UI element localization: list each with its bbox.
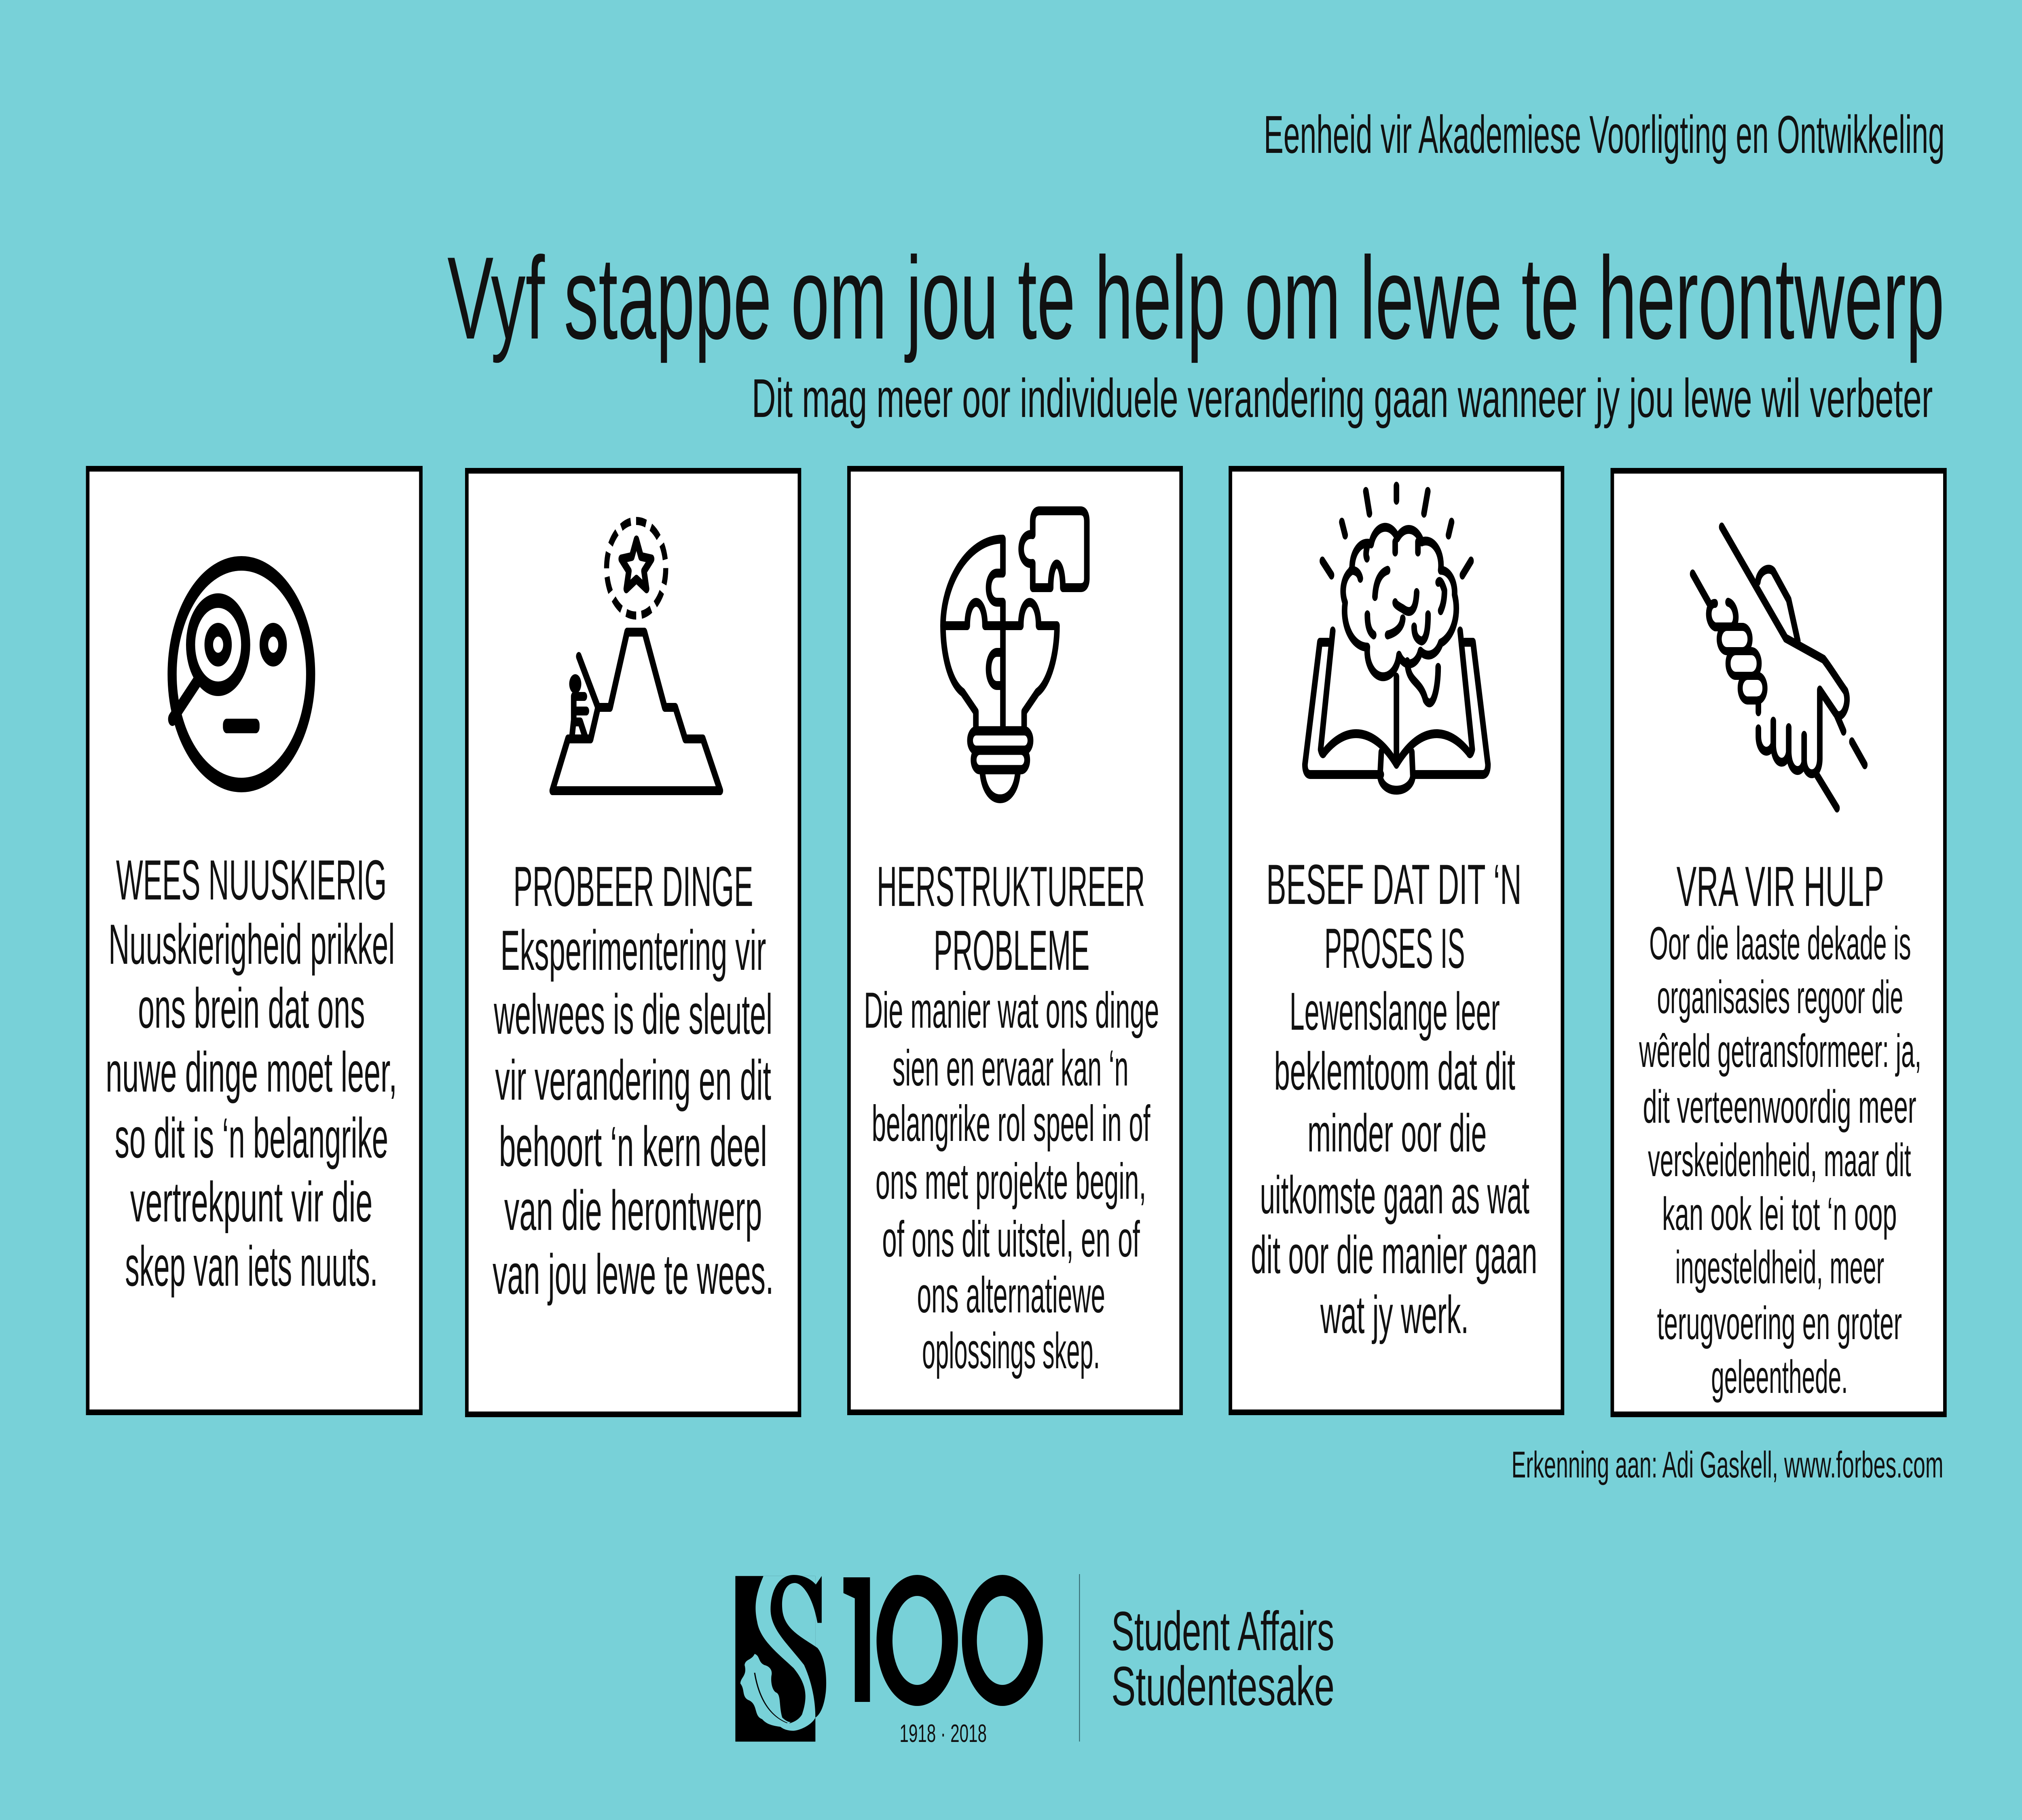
body text: belangrike rol speel in of (872, 1096, 1151, 1152)
department name: Student Affairs (1111, 1601, 1334, 1662)
heading: WEES NUUSKIERIG (116, 848, 387, 912)
body text (864, 982, 1159, 1380)
body text: wêreld getransformeer: ja, (1639, 1025, 1921, 1077)
heading (1266, 853, 1521, 980)
department name: Studentesake (1111, 1656, 1335, 1717)
body text: oplossings skep. (922, 1323, 1100, 1380)
panel: probeer dinge (467, 471, 799, 1414)
body text: so dit is ‘n belangrike (115, 1106, 388, 1170)
panel: wees nuuskierig (88, 469, 421, 1412)
body text: terugvoering en groter (1657, 1297, 1902, 1349)
body text: geleenthede. (1711, 1351, 1848, 1403)
body text: Nuuskierigheid prikkel (108, 912, 395, 976)
heading: BESEF DAT DIT ‘N (1266, 853, 1521, 916)
body text: of ons dit uitstel, en of (882, 1211, 1140, 1268)
icon: brain over open book (1305, 486, 1488, 790)
body text: wat jy werk. (1320, 1285, 1469, 1345)
body text (1251, 982, 1537, 1345)
panel: herstruktureer probleme (849, 469, 1181, 1412)
body text (106, 912, 397, 1298)
heading: HERSTRUKTUREER (877, 855, 1145, 918)
panel: vra vir hulp (1612, 471, 1945, 1414)
body text: beklemtoom dat dit (1274, 1041, 1515, 1101)
heading (877, 855, 1145, 982)
heading: PROBLEME (934, 918, 1089, 982)
department name (1111, 1601, 1335, 1717)
body text: ons brein dat ons (138, 976, 365, 1040)
body text: van die herontwerp (504, 1179, 762, 1242)
body text: skep van iets nuuts. (125, 1234, 378, 1298)
body text: van jou lewe te wees. (493, 1242, 774, 1306)
title: Vyf stappe om jou te help om lewe te herontwerp (447, 233, 1944, 364)
body text: welwees is die sleutel (494, 982, 772, 1046)
icon: puzzle light bulb (943, 511, 1087, 799)
panel: besef dat dit n proses is (1230, 469, 1563, 1412)
heading: PROBEER DINGE (513, 855, 753, 918)
body text: Eksperimentering vir (501, 918, 766, 982)
body text: behoort ‘n kern deel (499, 1115, 767, 1178)
credit line: Erkenning aan: Adi Gaskell, www.forbes.com (1512, 1444, 1944, 1486)
body text: Oor die laaste dekade is (1649, 918, 1911, 969)
unit name: Eenheid vir Akademiese Voorligting en Ontwikkeling (1264, 105, 1945, 165)
logo divider (1079, 1574, 1080, 1742)
logo: S100 (735, 1575, 1043, 1747)
card frame (88, 469, 421, 1412)
logo numeral 100 (844, 1575, 1043, 1706)
icon: face with magnifying glass (172, 563, 311, 785)
icon: mountain climber and star (552, 521, 720, 791)
body text: organisasies regoor die (1657, 971, 1903, 1023)
body text: Die manier wat ons dinge (864, 982, 1159, 1039)
body text: verskeidenheid, maar dit (1648, 1134, 1911, 1186)
body text (493, 918, 774, 1306)
card frame (1612, 471, 1945, 1414)
card frame (849, 469, 1181, 1412)
icon: helping hands (1693, 527, 1865, 808)
body text: vertrekpunt vir die (130, 1170, 372, 1234)
card frame (1230, 469, 1563, 1412)
body text: minder oor die (1307, 1103, 1487, 1163)
heading: PROSES IS (1324, 916, 1465, 980)
body text: sien en ervaar kan ‘n (893, 1040, 1129, 1097)
body text: uitkomste gaan as wat (1260, 1165, 1529, 1225)
logo crest (735, 1575, 826, 1742)
body text: dit oor die manier gaan (1251, 1225, 1537, 1285)
logo years: 1918 · 2018 (899, 1719, 987, 1747)
subtitle: Dit mag meer oor individuele verandering gaan wanneer jy jou lewe wil verbeter (752, 368, 1933, 429)
body text (1639, 918, 1921, 1403)
body text: vir verandering en dit (495, 1048, 771, 1112)
body text: ingesteldheid, meer (1675, 1242, 1884, 1293)
card frame (467, 471, 799, 1414)
body text: nuwe dinge moet leer, (106, 1040, 397, 1104)
body text: ons met projekte begin, (876, 1153, 1146, 1210)
heading: VRA VIR HULP (1677, 855, 1884, 918)
body text: kan ook lei tot ‘n oop (1662, 1188, 1897, 1240)
body text: Lewenslange leer (1290, 982, 1500, 1041)
body text: dit verteenwoordig meer (1643, 1081, 1916, 1133)
body text: ons alternatiewe (917, 1267, 1105, 1324)
